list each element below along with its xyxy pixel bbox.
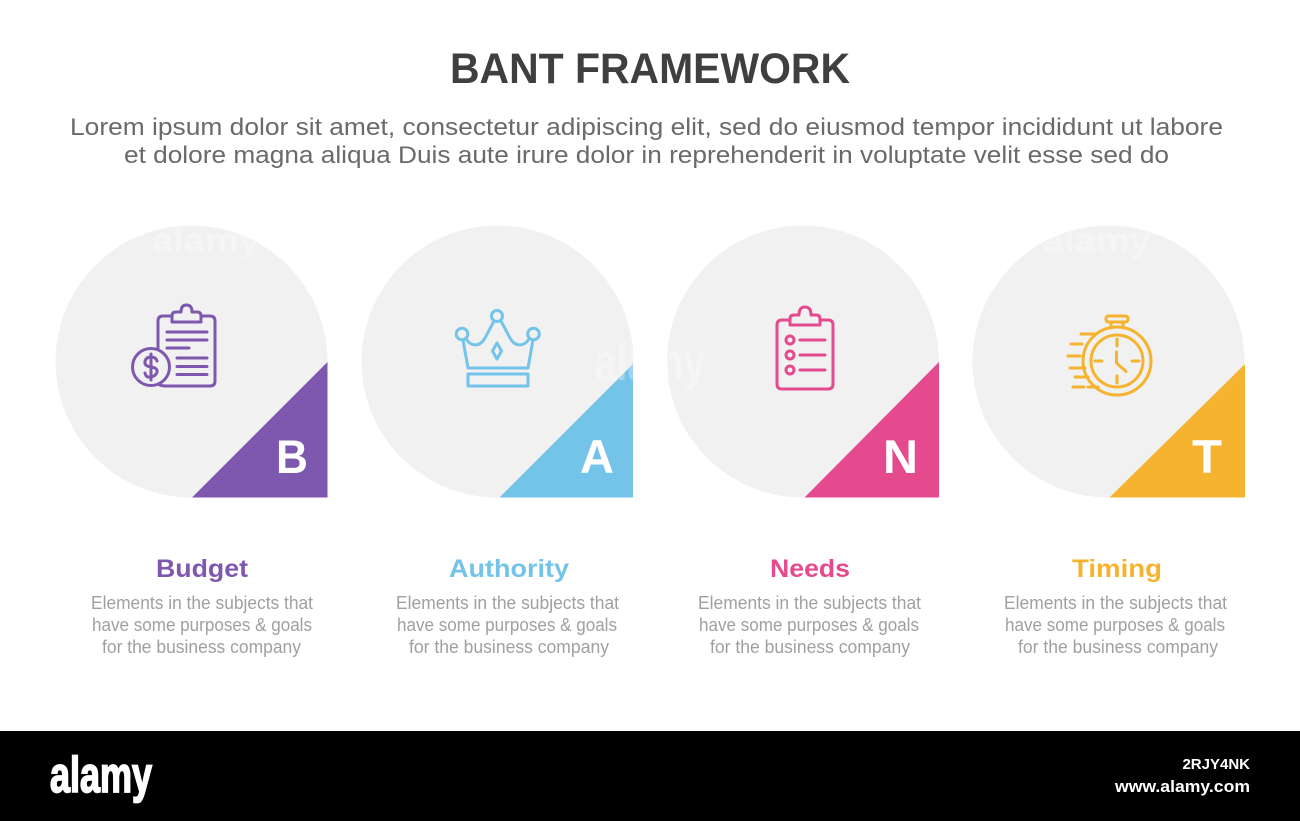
title: BANT FRAMEWORK	[450, 45, 850, 93]
panel: needs	[667, 226, 939, 657]
watermarks: alamy	[595, 334, 705, 392]
budget circle	[56, 226, 328, 498]
needs description: Elements in the subjects that	[698, 593, 921, 613]
needs corner triangle	[804, 362, 939, 498]
budget corner triangle	[192, 362, 328, 498]
budget heading: Budget	[156, 555, 249, 583]
authority description: have some purposes & goals	[397, 615, 617, 635]
icon: clipboard with dollar coin	[132, 305, 215, 386]
icon: stopwatch	[1068, 316, 1151, 395]
watermarks: alamy	[1043, 222, 1151, 260]
authority description: Elements in the subjects that	[396, 593, 619, 613]
authority letter: A	[580, 430, 614, 483]
timing heading: Timing	[1072, 555, 1162, 583]
needs description	[698, 593, 921, 657]
panel: timing	[972, 226, 1245, 657]
subtitle text block	[70, 114, 1223, 169]
needs circle	[667, 226, 939, 498]
timing corner triangle	[1110, 364, 1245, 498]
icon: crown	[456, 310, 539, 386]
panel: authority	[362, 226, 634, 657]
subtitle text block: et dolore magna aliqua Duis aute irure dolor in reprehenderit in voluptate velit esse sed do	[124, 142, 1169, 169]
panel: budget	[56, 226, 328, 657]
budget description: for the business company	[102, 637, 301, 657]
timing circle	[972, 226, 1244, 498]
timing description	[1004, 593, 1227, 657]
timing description: have some purposes & goals	[1005, 615, 1225, 635]
subtitle text block: Lorem ipsum dolor sit amet, consectetur adipiscing elit, sed do eiusmod tempor incididunt ut labore	[70, 114, 1223, 141]
authority circle	[362, 226, 634, 498]
timing description: for the business company	[1018, 637, 1218, 657]
needs heading: Needs	[770, 555, 850, 583]
needs letter: N	[883, 430, 918, 483]
image id: 2RJY4NK	[1182, 756, 1250, 773]
budget description: have some purposes & goals	[92, 615, 312, 635]
website: www.alamy.com	[1114, 778, 1250, 796]
timing letter: T	[1192, 430, 1222, 483]
authority heading: Authority	[449, 555, 569, 583]
needs description: for the business company	[710, 637, 910, 657]
watermarks	[152, 222, 1151, 392]
footer bar	[0, 731, 1300, 821]
authority description	[396, 593, 619, 657]
footer logo: alamy	[50, 747, 152, 803]
budget description: Elements in the subjects that	[91, 593, 313, 613]
watermarks: alamy	[152, 222, 260, 260]
icon: checklist clipboard	[777, 307, 833, 389]
authority corner triangle	[500, 364, 633, 498]
timing description: Elements in the subjects that	[1004, 593, 1227, 613]
budget letter: B	[276, 430, 308, 483]
authority description: for the business company	[409, 637, 609, 657]
needs description: have some purposes & goals	[699, 615, 919, 635]
budget description	[91, 593, 313, 657]
